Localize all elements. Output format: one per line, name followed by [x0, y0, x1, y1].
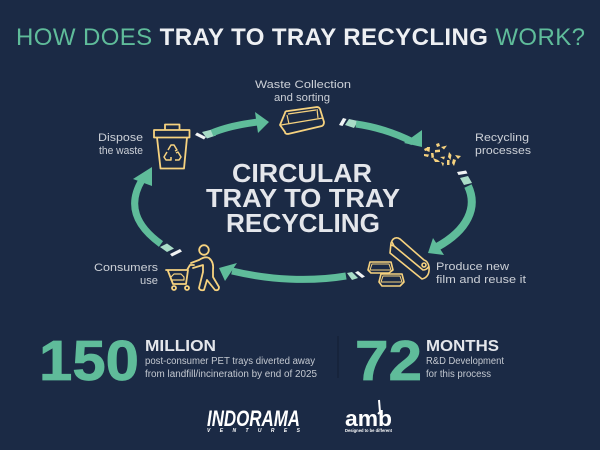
logo: Indorama Ventures: VENTURES — [207, 428, 301, 434]
label: consumers use: use — [140, 275, 158, 287]
center heading: RECYCLING — [226, 208, 380, 238]
icon: film roll and trays — [368, 238, 429, 286]
stat: 150 million: 150 — [39, 329, 139, 393]
icon: tray — [280, 107, 324, 134]
stat: 150 million: post-consumer PET trays diverted away — [145, 356, 315, 367]
label: consumers use — [94, 262, 159, 287]
stat: 72 months: for this process — [426, 369, 491, 380]
arrow: recycling to film — [428, 170, 472, 255]
stat: 72 months: R&D Development — [426, 356, 504, 367]
stat: 72 months: MONTHS — [426, 338, 499, 355]
label: produce new film: film and reuse it — [436, 274, 526, 286]
stat: 72 months: 72 — [355, 329, 422, 393]
stat: 150 million — [39, 329, 317, 393]
label: waste collection: Waste Collection — [255, 79, 351, 91]
label: waste collection: and sorting — [274, 92, 330, 104]
center heading: CIRCULAR — [232, 158, 372, 188]
logo: Indorama Ventures: INDORAMA — [207, 406, 300, 431]
stat: 150 million: MILLION — [145, 338, 216, 355]
label: produce new film — [436, 261, 526, 286]
label: dispose the waste: Dispose — [98, 132, 143, 144]
title: HOW DOES TRAY TO TRAY RECYCLING WORK? — [16, 24, 585, 51]
center heading: TRAY TO TRAY — [206, 183, 400, 213]
label: dispose the waste — [98, 132, 143, 157]
label: recycling processes: Recycling — [475, 132, 529, 144]
arrow: film to consumers — [219, 263, 365, 281]
icon: recycling bin — [154, 124, 190, 168]
label: dispose the waste: the waste — [99, 145, 143, 157]
arrow: bin to tray — [195, 112, 269, 140]
logo: AMB: amb — [345, 406, 392, 431]
arrow: consumers to bin — [133, 167, 182, 256]
label: waste collection — [255, 79, 351, 104]
label: recycling processes — [475, 132, 532, 157]
label: recycling processes: processes — [475, 145, 532, 157]
stat: 150 million: from landfill/incineration by end of 2025 — [145, 369, 317, 380]
icon: consumer with shopping cart — [166, 245, 219, 290]
logo: AMB: Designed to be different — [345, 428, 392, 433]
arrow: tray to recycling — [339, 118, 422, 147]
stat: 72 months — [355, 329, 504, 393]
center heading — [206, 158, 400, 238]
icon: plastic flakes — [424, 143, 461, 166]
label: produce new film: Produce new — [436, 261, 509, 273]
label: consumers use: Consumers — [94, 262, 159, 274]
